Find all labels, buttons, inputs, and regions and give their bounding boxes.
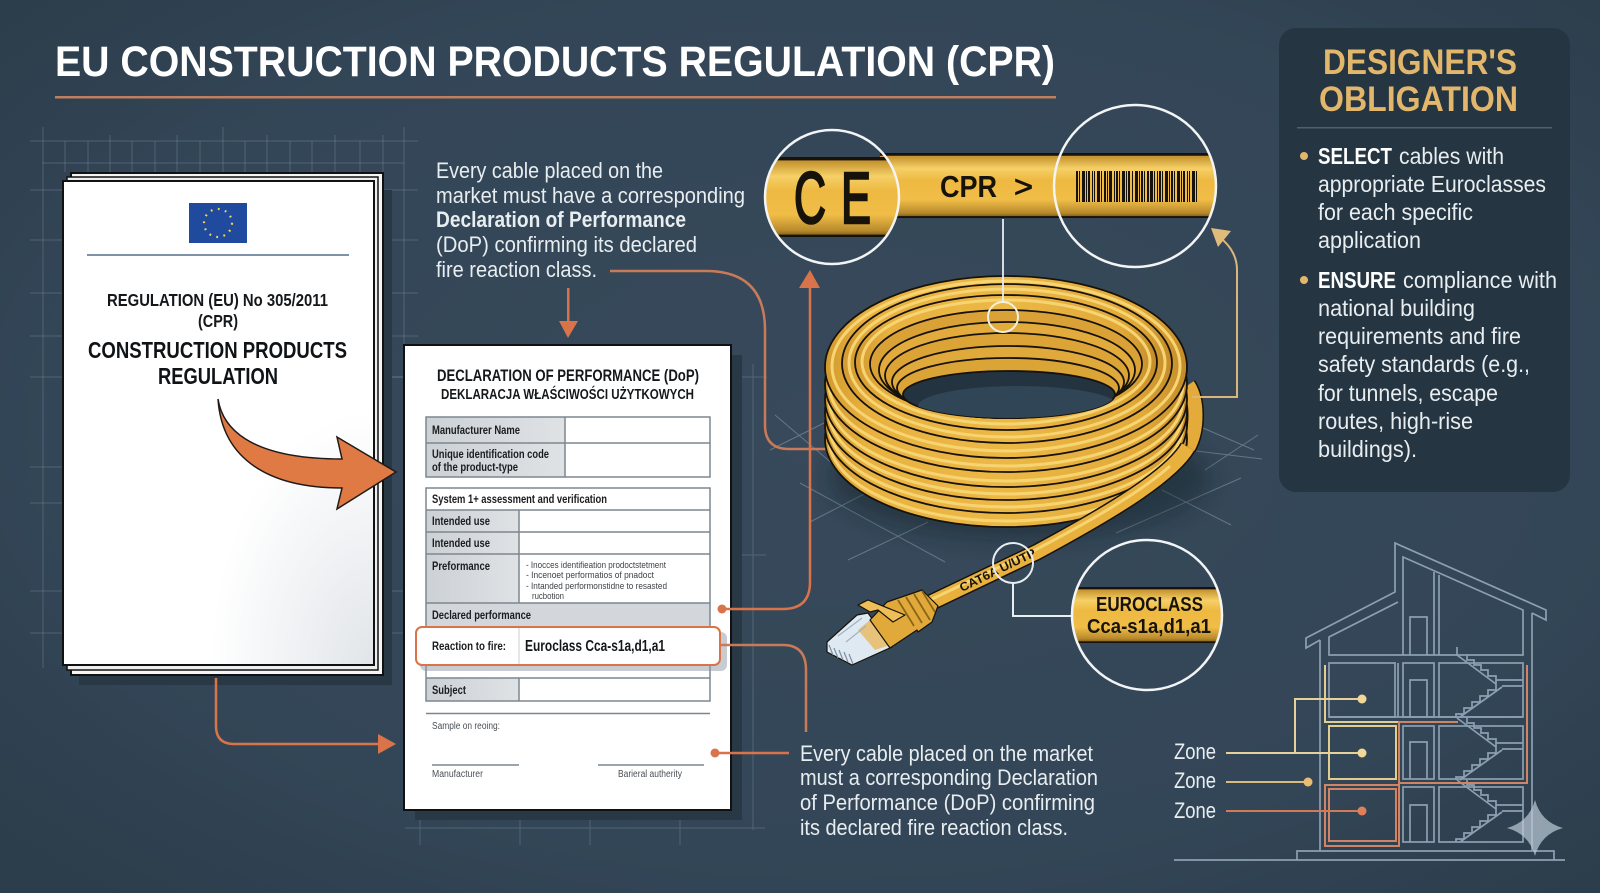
- table: manufacturer: of the product-type: [432, 460, 518, 474]
- text block: upper callout: fire reaction class.: [436, 257, 597, 282]
- highlighted row: reaction to fire: Reaction to fire:: [432, 639, 506, 653]
- bullet: select: cables with: [1399, 143, 1504, 169]
- signature block: [426, 714, 710, 780]
- regulation abbreviation: (CPR): [198, 311, 238, 331]
- panel heading: OBLIGATION: [1319, 80, 1518, 119]
- text block: lower callout: its declared fire reaction class.: [800, 815, 1068, 840]
- signature block: Barieral autherity: [618, 769, 682, 780]
- signature block: Manufacturer: [432, 769, 484, 780]
- zone label: upper: Zone: [1174, 739, 1216, 764]
- coil side windings: [825, 296, 1187, 527]
- text block: lower callout: must a corresponding Declaration: [800, 765, 1098, 790]
- text block: upper callout: [436, 158, 745, 282]
- text block: lower callout: of Performance (DoP) confirming: [800, 790, 1095, 815]
- arrow: coil to barcode: [1192, 228, 1237, 397]
- icon: RJ45 connector: [827, 590, 938, 665]
- zone label: middle: Zone: [1174, 768, 1216, 793]
- bullet: select: application: [1318, 227, 1421, 253]
- blueprint grid behind documents: [30, 127, 767, 845]
- table: performance: rucbotion: [532, 591, 564, 602]
- table: manufacturer: [426, 417, 710, 477]
- bullet: ensure: safety standards (e.g.,: [1318, 351, 1530, 377]
- table: performance: Preformance: [432, 559, 490, 573]
- bullet: select: SELECT: [1318, 143, 1392, 169]
- panel heading: [1319, 43, 1518, 119]
- bullet: ensure: for tunnels, escape: [1318, 380, 1498, 406]
- panel: designer's obligation: [1279, 28, 1570, 492]
- cable coil: [825, 276, 1196, 603]
- bullet: ensure: ENSURE: [1318, 267, 1396, 293]
- text block: lower callout: Every cable placed on the market: [800, 741, 1093, 766]
- arrow: regulation to DoP: [218, 399, 396, 509]
- table: performance: - Incenoet performatios of pnadoct: [526, 570, 654, 581]
- bullet: select: appropriate Euroclasses: [1318, 171, 1546, 197]
- zone label: upper: [1174, 694, 1366, 764]
- table: performance: - Intanded performonstidne to resasted: [526, 581, 667, 592]
- building section diagram: [1174, 543, 1565, 860]
- panel: declaration of performance document: [404, 345, 742, 820]
- bullet: select: for each specific: [1318, 199, 1473, 225]
- table: performance: System 1+ assessment and verification: [432, 492, 607, 506]
- bullet: ensure: routes, high-rise: [1318, 408, 1473, 434]
- connector: euroclass row to lower callout: [721, 645, 806, 732]
- bullet: ensure: national building: [1318, 295, 1475, 321]
- cable marking magnifier: [760, 105, 1220, 332]
- fire zone highlights: [1325, 665, 1527, 846]
- table: performance: Intended use: [432, 514, 490, 528]
- highlighted row: reaction to fire: [416, 627, 727, 671]
- table: performance: Subject: [432, 683, 466, 697]
- cable tail behind coil: [1188, 385, 1196, 448]
- leader from coil: [988, 219, 1018, 332]
- zone label: lower: [1174, 798, 1366, 823]
- regulation name: [88, 337, 347, 389]
- table: manufacturer: Unique identification code: [432, 447, 549, 461]
- text block: upper callout: market must have a corresponding: [436, 183, 745, 208]
- euroclass magnifier: EUROCLASS: [1096, 594, 1203, 616]
- bullet: select: [1300, 143, 1546, 253]
- highlighted row: reaction to fire: Euroclass Cca-s1a,d1,a1: [525, 638, 665, 655]
- euroclass magnifier: [993, 540, 1224, 690]
- regulation number: REGULATION (EU) No 305/2011: [107, 290, 328, 310]
- arrow: regulation down to DoP: [216, 678, 396, 754]
- building outline: [1174, 543, 1565, 860]
- bullet: ensure: requirements and fire: [1318, 323, 1521, 349]
- icon: watermark star: [1507, 800, 1563, 856]
- document subtitle: DEKLARACJA WŁAŚCIWOŚCI UŻYTKOWYCH: [441, 385, 694, 403]
- table: performance: Intended use: [432, 536, 490, 550]
- CPR marking: >: [1014, 169, 1033, 204]
- barcode lens: [1050, 105, 1220, 267]
- text block: upper callout: (DoP) confirming its declared: [436, 232, 697, 257]
- table: performance: Declared performance: [432, 608, 531, 622]
- CPR marking: CPR: [940, 169, 997, 204]
- signature block: Sample on reoing:: [432, 721, 500, 732]
- regulation name: REGULATION: [158, 363, 278, 389]
- bullet: ensure: [1300, 267, 1557, 462]
- shadow of coil and perspective lines: [770, 415, 1262, 562]
- cable tail in front of coil: [930, 447, 1188, 603]
- arrow: callout to DoP: [559, 288, 578, 338]
- CE mark lens: C: [794, 159, 826, 239]
- arrow: declared performance to CE mark: [718, 270, 820, 614]
- document title: DECLARATION OF PERFORMANCE (DoP): [437, 366, 699, 385]
- table: performance: [426, 488, 710, 701]
- connector: dop to coil: [610, 271, 830, 449]
- table: manufacturer: Manufacturer Name: [432, 423, 520, 437]
- CE mark lens: E: [841, 159, 871, 239]
- connector: signature block to lower callout: [710, 748, 789, 758]
- zone label: lower: Zone: [1174, 798, 1216, 823]
- text block: upper callout: Declaration of Performance: [436, 207, 686, 232]
- bullet: ensure: buildings).: [1318, 436, 1417, 462]
- icon: EU flag: [189, 203, 247, 243]
- regulation name: CONSTRUCTION PRODUCTS: [88, 337, 347, 363]
- text block: lower callout: [800, 741, 1098, 840]
- panel heading: DESIGNER'S: [1323, 43, 1517, 82]
- staircases: [1456, 647, 1523, 842]
- cable band: [880, 153, 1070, 218]
- panel: regulation document: [63, 173, 396, 685]
- CE mark lens: [760, 130, 905, 264]
- bullet: ensure: compliance with: [1403, 267, 1557, 293]
- table: performance: - Inocces identifieation prodoctstetment: [526, 560, 666, 571]
- text block: upper callout: Every cable placed on the: [436, 158, 663, 183]
- coil top windings: [825, 276, 1187, 458]
- zone label: middle: [1174, 768, 1312, 793]
- euroclass magnifier: Cca-s1a,d1,a1: [1087, 616, 1211, 638]
- cable printed marking: CAT6A U/UTP: [957, 546, 1038, 595]
- title: EU CONSTRUCTION PRODUCTS REGULATION (CPR): [55, 38, 1055, 86]
